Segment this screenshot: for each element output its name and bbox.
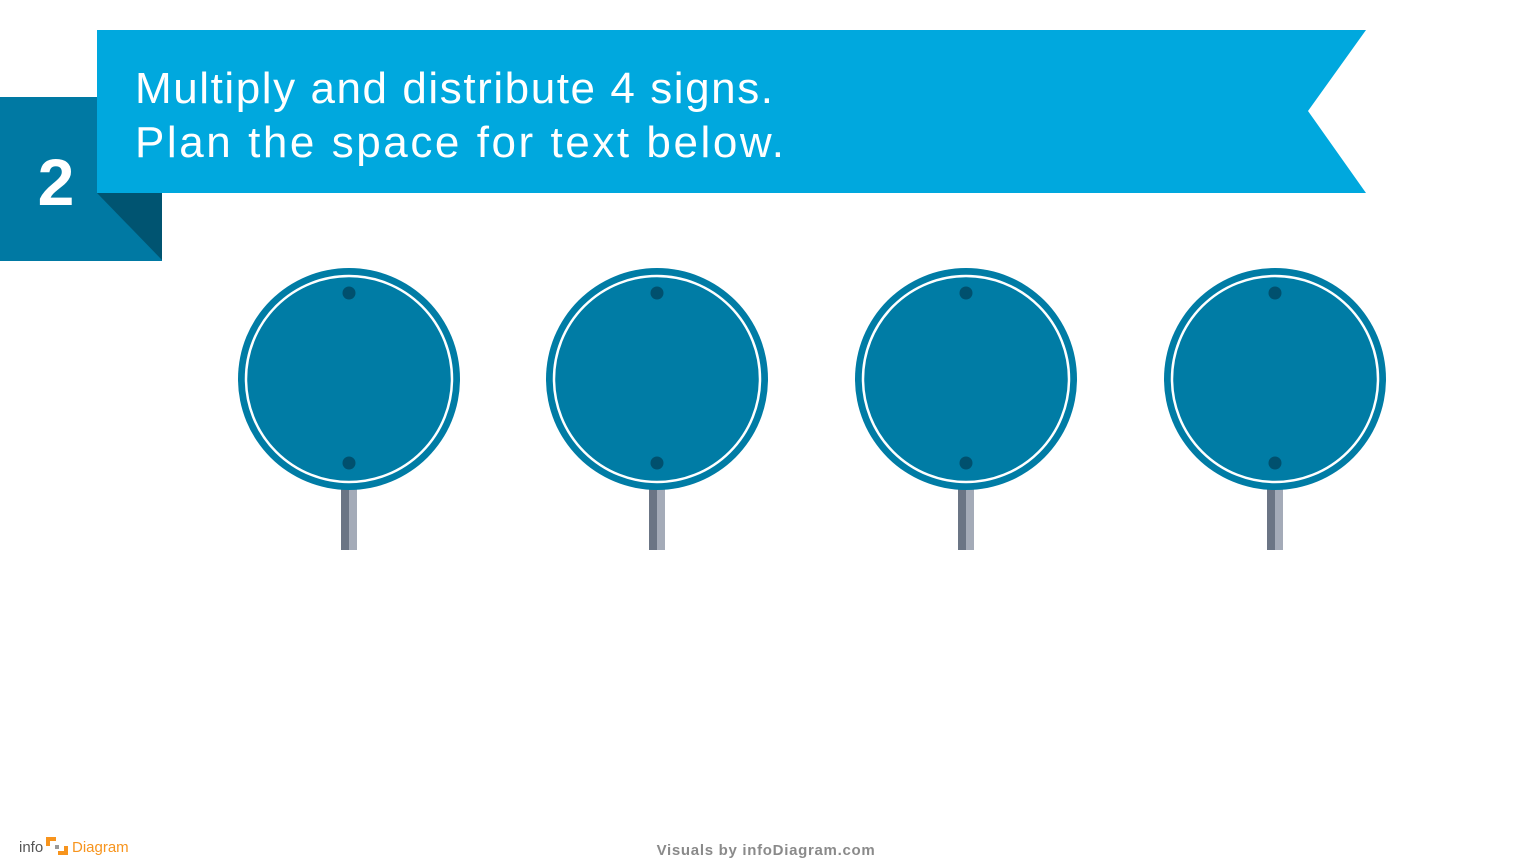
logo: infoDiagram: info xyxy=(19,839,43,856)
title banner: Multiply and distribute 4 signs. xyxy=(135,64,773,113)
logo: infoDiagram: Diagram xyxy=(72,839,129,856)
footer credit: Visuals by infoDiagram.com xyxy=(657,842,875,859)
sign 1 xyxy=(238,268,460,550)
sign 4 xyxy=(1164,268,1386,550)
number box: 2 xyxy=(38,145,74,219)
header graphic xyxy=(0,30,1366,261)
title banner xyxy=(97,30,1366,193)
logo: infoDiagram xyxy=(19,837,129,856)
sign 3 xyxy=(855,268,1077,550)
title banner: Plan the space for text below. xyxy=(135,118,784,167)
number box xyxy=(0,97,162,261)
sign 2 xyxy=(546,268,768,550)
signs row xyxy=(238,268,1386,550)
